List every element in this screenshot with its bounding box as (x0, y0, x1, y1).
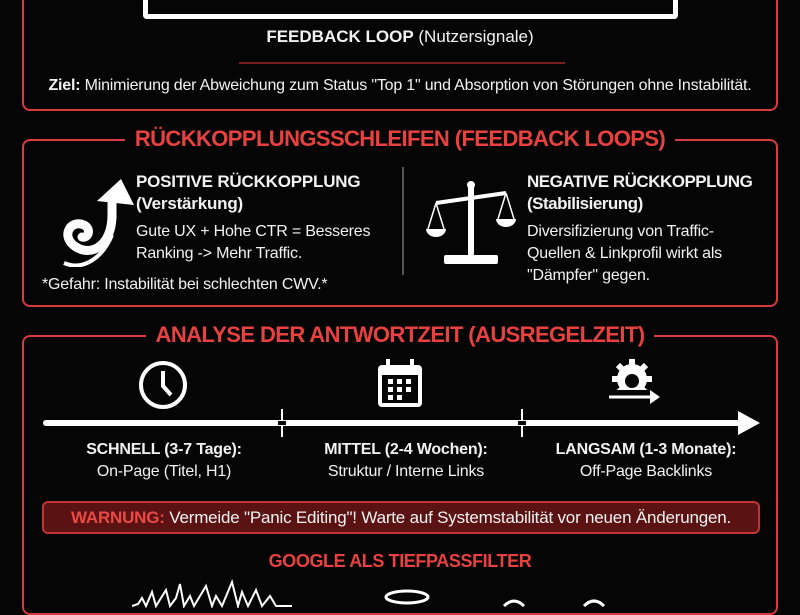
stage: fast (86, 441, 242, 480)
subheading: low pass filter: GOOGLE ALS TIEFPASSFILTER (269, 551, 531, 571)
icon: calendar (378, 359, 422, 407)
stage: fast: SCHNELL (3-7 Tage): (86, 441, 242, 458)
warning callout: WARNUNG: Vermeide "Panic Editing"! Warte auf Systemstabilität vor neuen Änderungen. (71, 508, 731, 527)
stage: fast: On-Page (Titel, H1) (97, 463, 231, 480)
warning callout (42, 501, 760, 534)
negative feedback text: Diversifizierung von Traffic- (527, 223, 714, 240)
negative feedback text: Quellen & Linkprofil wirkt als (527, 245, 722, 262)
positive feedback text: Gute UX + Hohe CTR = Besseres (136, 223, 370, 240)
panel: response time (22, 335, 778, 615)
goal text: Ziel: Minimierung der Abweichung zum Status "Top 1" und Absorption von Störungen ohne Instabilität. (48, 77, 752, 94)
heading: response time analysis: ANALYSE DER ANTWORTZEIT (AUSREGELZEIT) (156, 322, 644, 347)
negative feedback text (527, 172, 752, 284)
positive feedback text: POSITIVE RÜCKKOPPLUNG (136, 172, 360, 191)
stage: medium: MITTEL (2-4 Wochen): (324, 441, 488, 458)
negative feedback text: (Stabilisierung) (527, 194, 643, 213)
danger note: *Gefahr: Instabilität bei schlechten CWV.* (42, 276, 327, 293)
negative feedback text: "Dämpfer" gegen. (527, 267, 650, 284)
diagram frame (white box) (143, 0, 678, 19)
stage: slow (556, 441, 736, 480)
icon: filter funnel (384, 590, 430, 604)
positive feedback text (136, 172, 370, 262)
icon: noisy waveform (132, 579, 292, 608)
heading: feedback loops: RÜCKKOPPLUNGSSCHLEIFEN (FEEDBACK LOOPS) (135, 126, 665, 151)
icon: smooth output (503, 599, 605, 607)
stage: slow: LANGSAM (1-3 Monate): (556, 441, 736, 458)
stage: slow: Off-Page Backlinks (580, 463, 712, 480)
icon: gear with arrow (609, 359, 660, 404)
icon: spiral arrow (63, 179, 134, 267)
divider (402, 167, 404, 275)
positive feedback text: Ranking -> Mehr Traffic. (136, 245, 302, 262)
feedback loop label: FEEDBACK LOOP (Nutzersignale) (266, 27, 534, 46)
stage: medium: Struktur / Interne Links (328, 463, 484, 480)
negative feedback text: NEGATIVE RÜCKKOPPLUNG (527, 172, 752, 191)
panel: feedback loops (22, 139, 778, 307)
panel: top summary (22, 0, 778, 111)
stage: medium (324, 441, 488, 480)
icon: scales (426, 181, 516, 264)
timeline arrow (43, 409, 760, 437)
icon: clock (139, 361, 187, 409)
positive feedback text: (Verstärkung) (136, 194, 243, 213)
